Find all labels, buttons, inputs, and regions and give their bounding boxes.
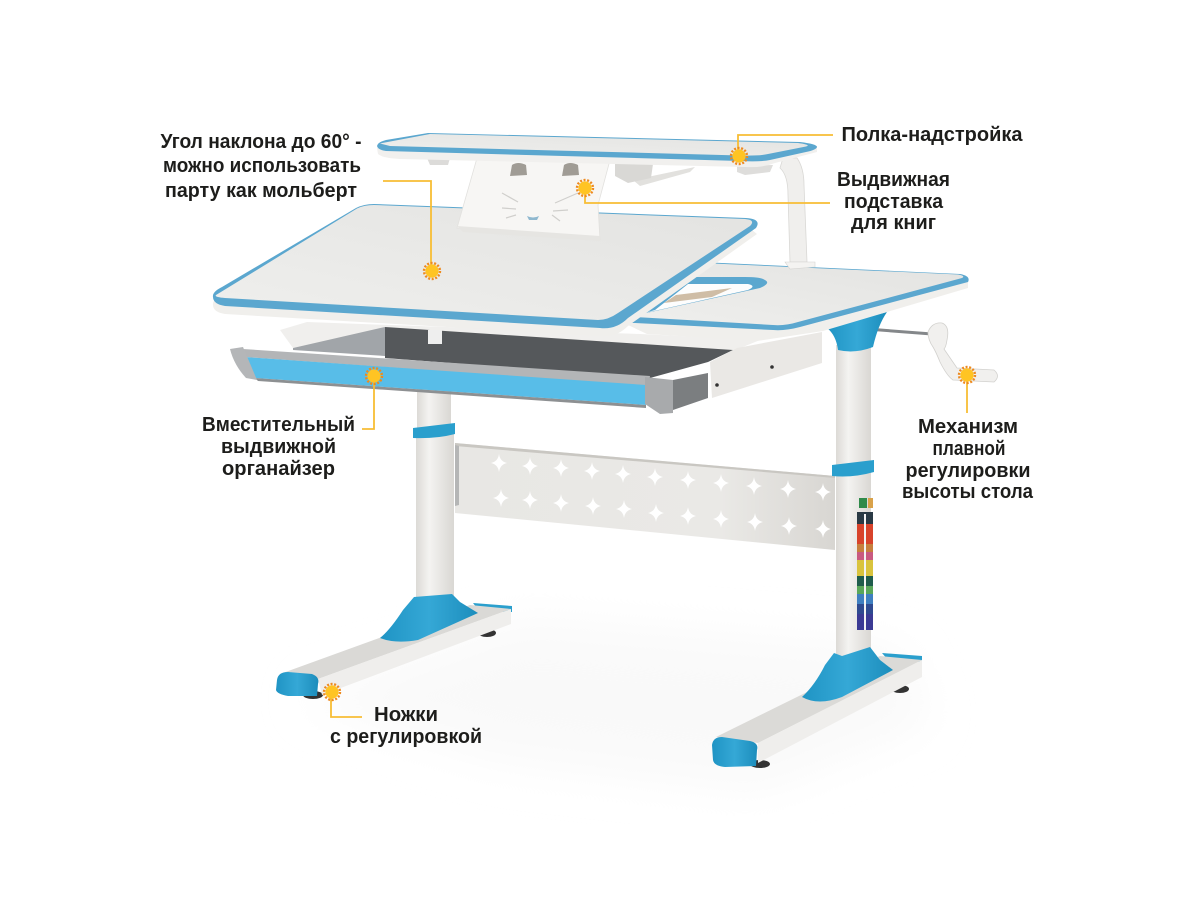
label: adjustable feet <box>330 704 482 748</box>
drawer organizer <box>230 322 822 414</box>
label: book stand: для книг <box>851 212 936 234</box>
left column <box>413 385 455 605</box>
crank handle <box>867 323 998 382</box>
crossbeam with star cutouts <box>455 443 835 550</box>
label: adjustable feet: с регулировкой <box>330 726 482 748</box>
label: height mechanism: высоты стола <box>902 481 1034 503</box>
label: book stand: подставка <box>844 191 944 213</box>
label: tilt angle: парту как мольберт <box>165 180 357 202</box>
label: height mechanism: регулировки <box>906 460 1030 482</box>
book stand with cat face <box>457 158 610 241</box>
top shelf <box>377 133 817 167</box>
label: drawer organizer <box>202 414 355 480</box>
label: adjustable feet: Ножки <box>374 704 438 726</box>
label: book stand: Выдвижная <box>837 169 950 191</box>
label: tilt angle <box>160 131 362 202</box>
tilting main desktop <box>213 204 758 336</box>
label: height mechanism: Механизм <box>918 416 1018 438</box>
shelf support post <box>427 158 815 269</box>
callout leader: desktop tilt <box>383 181 440 279</box>
left base <box>276 594 512 699</box>
right column with height chart <box>832 345 874 667</box>
label: tilt angle: можно использовать <box>163 155 361 177</box>
label: drawer organizer: выдвижной <box>221 436 336 458</box>
callout leader: crank <box>959 367 975 413</box>
right column housing <box>827 312 887 351</box>
callout leader: shelf <box>731 135 833 164</box>
right base <box>712 647 922 768</box>
fixed right desktop <box>628 262 969 341</box>
label: height mechanism <box>902 416 1034 503</box>
callout leader: book stand <box>577 180 830 203</box>
callout leader: feet <box>324 684 362 717</box>
label: shelf: Полка-надстройка <box>842 124 1023 146</box>
label: height mechanism: плавной <box>932 438 1006 460</box>
desk illustration <box>213 133 998 768</box>
label: tilt angle: Угол наклона до 60° - <box>160 131 362 153</box>
label: drawer organizer: органайзер <box>222 458 335 480</box>
label: drawer organizer: Вместительный <box>202 414 355 436</box>
label: book stand <box>837 169 950 234</box>
callout leader: drawer <box>362 368 382 429</box>
floor shadow <box>300 620 930 790</box>
